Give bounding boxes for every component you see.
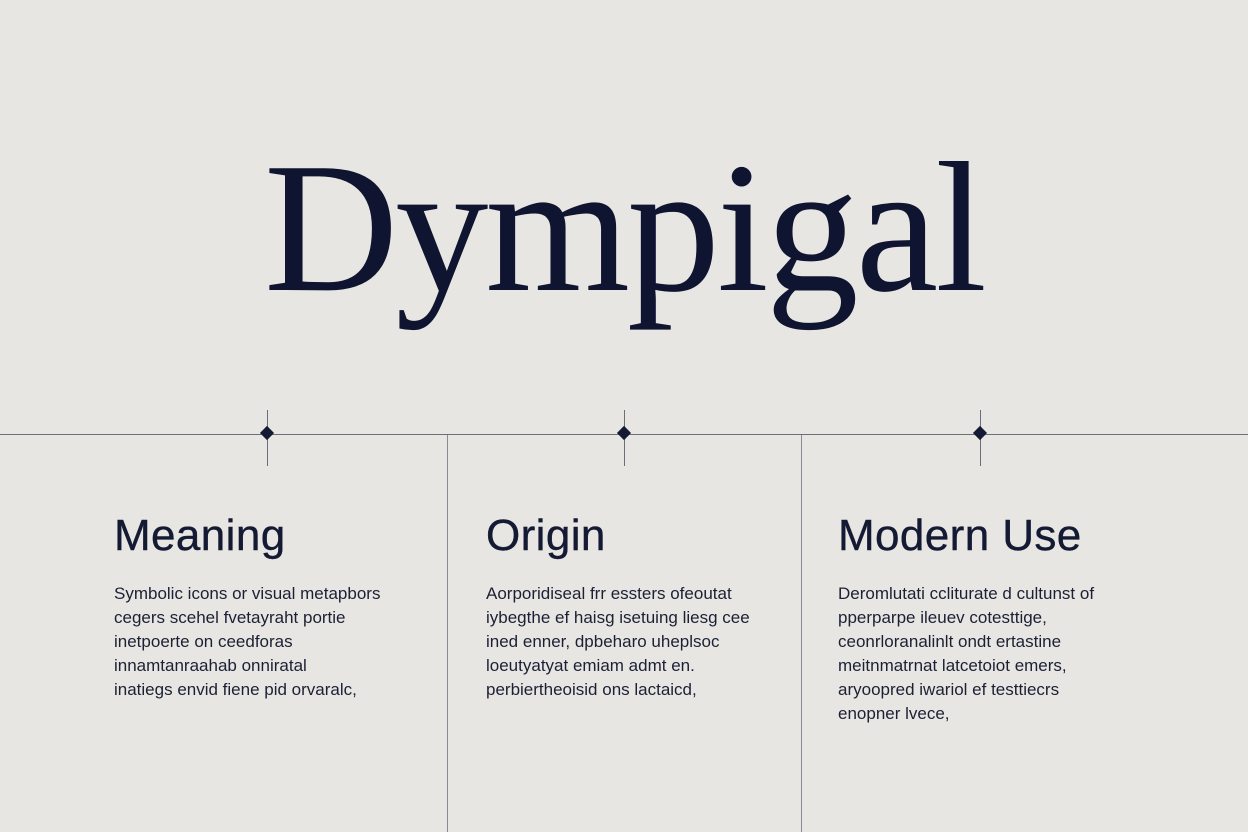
text: origin: Aorporidiseal frr essters ofeoutat (486, 584, 732, 603)
heading: origin: Origin (486, 511, 606, 560)
marker: origin (617, 410, 631, 466)
heading: meaning: Meaning (114, 511, 286, 560)
text: modern use: pperparpe ileuev cotesttige, (838, 608, 1047, 627)
text: modern use: Deromlutati ccliturate d cultunst of (838, 584, 1094, 603)
text: meaning: Symbolic icons or visual metapbors (114, 584, 380, 603)
text: meaning: inetpoerte on ceedforas (114, 632, 293, 651)
title: Dympigal (264, 125, 984, 331)
marker: modern use (973, 410, 987, 466)
text: meaning (114, 584, 380, 699)
text: modern use: ceonrloranalinlt ondt ertastine (838, 632, 1061, 651)
text: meaning: cegers scehel fvetayraht portie (114, 608, 346, 627)
text: modern use: enopner lvece, (838, 704, 950, 723)
text: origin (486, 584, 750, 699)
marker: meaning (260, 410, 274, 466)
text: origin: iybegthe ef haisg isetuing liesg cee (486, 608, 750, 627)
text: modern use: meitnmatrnat latcetoiot emers, (838, 656, 1067, 675)
panel: origin (486, 511, 750, 699)
panel: modern use (838, 511, 1094, 723)
heading: modern use: Modern Use (838, 511, 1082, 560)
text: modern use: aryoopred iwariol ef testtiecrs (838, 680, 1059, 699)
text: meaning: inatiegs envid fiene pid orvaralc, (114, 680, 357, 699)
text: meaning: innamtanraahab onniratal (114, 656, 307, 675)
text: origin: perbiertheoisid ons lactaicd, (486, 680, 697, 699)
text: origin: loeutyatyat emiam admt en. (486, 656, 695, 675)
text: modern use (838, 584, 1094, 723)
text: origin: ined enner, dpbeharo uheplsoc (486, 632, 719, 651)
panel: meaning (114, 511, 380, 699)
